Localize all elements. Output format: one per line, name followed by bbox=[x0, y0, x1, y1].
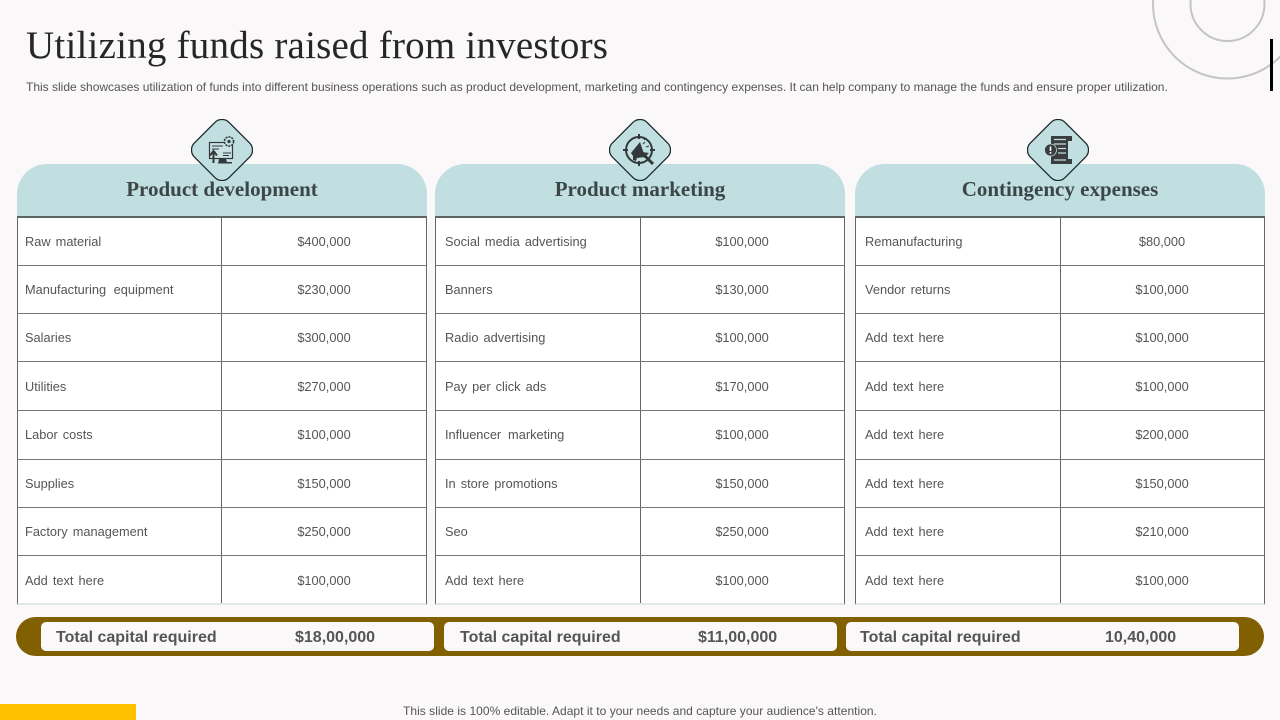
total: contingency expenses: Total capital required bbox=[860, 629, 1021, 646]
table: contingency costs: Add text here bbox=[865, 427, 944, 442]
table: contingency costs: $150,000 bbox=[1135, 476, 1189, 491]
table: product development costs: $230,000 bbox=[297, 282, 351, 297]
table: contingency costs: $200,000 bbox=[1135, 427, 1189, 442]
table: product development costs: $100,000 bbox=[297, 427, 351, 442]
panel: product development bbox=[17, 164, 427, 605]
table: product development costs: Utilities bbox=[25, 379, 66, 394]
table: product development costs: Manufacturing equipment bbox=[25, 282, 173, 297]
table: product development costs: $100,000 bbox=[297, 573, 351, 588]
table: product development costs: Add text here bbox=[25, 573, 104, 588]
table: product marketing costs: In store promotions bbox=[445, 476, 558, 491]
total: contingency expenses: 10,40,000 bbox=[1105, 629, 1176, 646]
decorative circles: top right bbox=[1152, 0, 1280, 91]
table: contingency costs: Add text here bbox=[865, 379, 944, 394]
table: product marketing costs bbox=[435, 216, 845, 605]
table: contingency costs: $80,000 bbox=[1139, 234, 1185, 249]
table: product marketing costs: Social media advertising bbox=[445, 234, 587, 249]
accent block: bottom left bbox=[0, 704, 136, 720]
table: contingency costs: Add text here bbox=[865, 476, 944, 491]
table: product development costs: Supplies bbox=[25, 476, 74, 491]
table: contingency costs: $100,000 bbox=[1135, 282, 1189, 297]
heading: product marketing: Product marketing bbox=[555, 177, 725, 201]
heading: contingency expenses: Contingency expenses bbox=[962, 177, 1158, 201]
table: product development costs: Salaries bbox=[25, 330, 71, 345]
icon: document with alert bbox=[1027, 119, 1089, 181]
heading: product marketing bbox=[435, 164, 845, 217]
table: product development costs: $300,000 bbox=[297, 330, 351, 345]
total: product marketing: Total capital required bbox=[460, 629, 621, 646]
table: product marketing costs: Radio advertising bbox=[445, 330, 545, 345]
total: product development: $18,00,000 bbox=[295, 629, 375, 646]
heading: product development bbox=[17, 164, 427, 217]
panel: product marketing bbox=[435, 164, 845, 605]
table: product development costs: $250,000 bbox=[297, 524, 351, 539]
subtitle text: This slide showcases utilization of funds into different business operations such as product development, marketing and contingency expenses. It can help company to manage the funds and ensure proper utilization. bbox=[26, 80, 1168, 94]
table: contingency costs: Add text here bbox=[865, 330, 944, 345]
footer note: This slide is 100% editable. Adapt it to your needs and capture your audience's attention. bbox=[403, 704, 877, 718]
table: product marketing costs: $100,000 bbox=[715, 234, 769, 249]
table: product development costs: $400,000 bbox=[297, 234, 351, 249]
totals bar bbox=[16, 617, 1264, 656]
table: product marketing costs: $100,000 bbox=[715, 573, 769, 588]
table: product marketing costs: $100,000 bbox=[715, 330, 769, 345]
table: contingency costs: $100,000 bbox=[1135, 379, 1189, 394]
table: contingency costs: Remanufacturing bbox=[865, 234, 962, 249]
total: product marketing bbox=[444, 622, 837, 651]
table: contingency costs: $100,000 bbox=[1135, 573, 1189, 588]
table: product marketing costs: $130,000 bbox=[715, 282, 769, 297]
table: product development costs: $270,000 bbox=[297, 379, 351, 394]
total: product development bbox=[41, 622, 434, 651]
total: product development: Total capital required bbox=[56, 629, 217, 646]
table: product marketing costs: Influencer marketing bbox=[445, 427, 564, 442]
table: contingency costs bbox=[855, 216, 1265, 605]
total: contingency expenses bbox=[846, 622, 1239, 651]
table: contingency costs: Vendor returns bbox=[865, 282, 950, 297]
table: contingency costs: $100,000 bbox=[1135, 330, 1189, 345]
table: product development costs: Raw material bbox=[25, 234, 101, 249]
table: product marketing costs: Add text here bbox=[445, 573, 524, 588]
title: Utilizing funds raised from investors bbox=[26, 24, 608, 67]
table: product marketing costs: Banners bbox=[445, 282, 493, 297]
heading: product development: Product development bbox=[126, 177, 318, 201]
table: product development costs: $150,000 bbox=[297, 476, 351, 491]
table: contingency costs: Add text here bbox=[865, 573, 944, 588]
table: contingency costs: $210,000 bbox=[1135, 524, 1189, 539]
table: product development costs: Factory management bbox=[25, 524, 147, 539]
heading: contingency expenses bbox=[855, 164, 1265, 217]
icon: presentation monitor with gear bbox=[191, 119, 253, 181]
table: product development costs bbox=[17, 216, 427, 605]
table: contingency costs: Add text here bbox=[865, 524, 944, 539]
table: product marketing costs: Pay per click ads bbox=[445, 379, 546, 394]
table: product development costs: Labor costs bbox=[25, 427, 93, 442]
total: product marketing: $11,00,000 bbox=[698, 629, 777, 646]
table: product marketing costs: $250,000 bbox=[715, 524, 769, 539]
icon: megaphone in target bbox=[609, 119, 671, 181]
table: product marketing costs: Seo bbox=[445, 524, 468, 539]
table: product marketing costs: $170,000 bbox=[715, 379, 769, 394]
table: product marketing costs: $150,000 bbox=[715, 476, 769, 491]
table: product marketing costs: $100,000 bbox=[715, 427, 769, 442]
panel: contingency expenses bbox=[855, 164, 1265, 605]
